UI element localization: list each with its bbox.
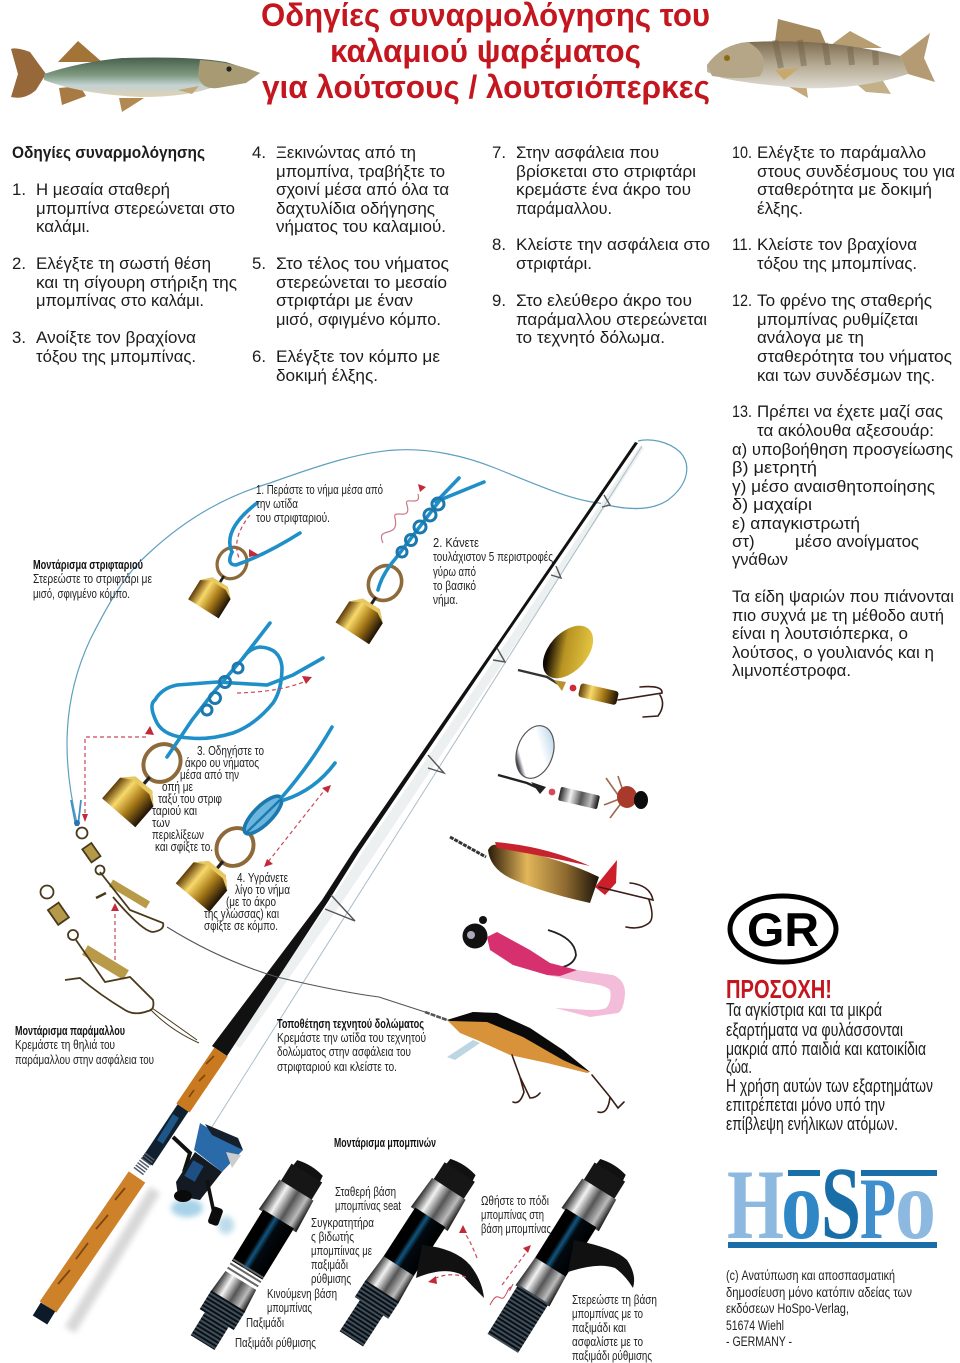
label: push reel foot: βάση μπομπίνας [481, 1221, 551, 1236]
text block: instructions column 4: έλξης. [757, 199, 803, 218]
label: knot step 3: μέσα από την [180, 767, 239, 782]
label: knot step 4: 4. Υγράνετε [237, 870, 288, 885]
text block: instructions column 2: 4. [252, 143, 266, 162]
text block: instructions column 4: τόξου της μπομπίνας. [757, 254, 917, 273]
label: leader mounting: Κρεμάστε τη θηλιά του [15, 1037, 115, 1052]
text block: instructions column 4: λούτσος, ο γουλιανός και η [732, 643, 934, 662]
logo: HoSpo: P [860, 1161, 896, 1258]
labels: reel seat parts: ρύθμισης [311, 1271, 351, 1286]
text block: instructions column 4: β) μετρητή [732, 458, 817, 477]
text block: instructions column 4: ανάλογα με τη [757, 328, 864, 347]
label: push reel foot: Ωθήστε το πόδι [481, 1193, 549, 1208]
warning block: εξαρτήματα να φυλάσσονται [726, 1019, 903, 1040]
label: secure reel seat: ασφαλίστε με το [572, 1334, 643, 1349]
label: swivel mounting: Μοντάρισμα στριφταριού [33, 557, 143, 572]
lure: wobbler [425, 1012, 624, 1112]
copyright text: - GERMANY - [726, 1334, 792, 1349]
labels: reel seat parts: Παξιμάδι ρύθμισης [235, 1335, 316, 1350]
trace leader with open snap [40, 886, 199, 1043]
warning block: ΠΡΟΣΟΧΗ! [726, 974, 832, 1004]
label: knot step 2: νήμα. [433, 592, 458, 607]
label: knot step 3: ταριού και [152, 803, 197, 818]
title: για λούτσους / λουτσιόπερκες [262, 69, 710, 105]
text block: instructions column 4: τα ακόλουθα αξεσουάρ: [757, 421, 934, 440]
label: knot step 2: τουλάχιστον 5 περιστροφές [433, 549, 553, 564]
label: leader mounting: παράμαλλου στην ασφάλεια του [15, 1052, 154, 1067]
label: knot step 4: (με το άκρο [226, 894, 276, 909]
text block: instructions column 4: Τα είδη ψαριών που πιάνονται [732, 587, 954, 606]
label: push reel foot [481, 1193, 551, 1236]
icon: spinning reel [171, 1123, 243, 1234]
logo: HoSpo [727, 1146, 937, 1261]
text block: instructions column 4: 11. [732, 235, 752, 254]
labels: reel seat parts: μπομπίνας seat [335, 1198, 401, 1213]
label: knot step 1: την ωτίδα [256, 496, 298, 511]
text block: instructions column 3 [492, 143, 710, 347]
text block: instructions column 4: 10. [732, 143, 752, 162]
text block: instructions column 1: Οδηγίες συναρμολόγησης [12, 143, 205, 162]
label: knot step 3: περιελίξεων [152, 827, 204, 842]
text block: instructions column 3: παράμαλλου. [516, 199, 612, 218]
labels: reel seat parts: Κινούμενη βάση [267, 1286, 337, 1301]
labels: reel seat parts: Συγκρατητήρα [311, 1215, 374, 1230]
text block: instructions column 4 [732, 143, 955, 680]
text block: instructions column 3: 9. [492, 291, 506, 310]
text block: instructions column 1: 1. [12, 180, 26, 199]
logo: HoSpo: S [821, 1146, 861, 1261]
label: knot step 3: άκρο ου νήματος [185, 755, 259, 770]
heading: reel mounting: Μοντάρισμα μπομπινών [334, 1135, 436, 1150]
text block: instructions column 1: μπομπίνας στο καλάμι. [36, 291, 204, 310]
label: lure placement: δολώματος στην ασφάλεια του [277, 1044, 411, 1059]
lure: silver spinner with fly [498, 721, 648, 818]
wire trace to lure [167, 927, 425, 1012]
copyright text [726, 1268, 912, 1349]
text block: instructions column 3: βρίσκεται στο στριφτάρι [516, 162, 696, 181]
text block: instructions column 4: δ) μαχαίρι [732, 495, 812, 514]
label: knot step 2: γύρω από [433, 564, 476, 579]
lure: gold spinner [518, 616, 663, 717]
labels: reel seat parts: παξιμάδι [311, 1257, 348, 1272]
text block: instructions column 2: στερεώνεται το μεσαίο [276, 273, 447, 292]
reel seat: step 2 [333, 1153, 484, 1351]
label: knot step 4: λίγο το νήμα [235, 882, 290, 897]
text block: instructions column 4: σταθερότητα του νήματος [757, 347, 952, 366]
copyright text: (c) Ανατύπωση και αποσπασματική [726, 1268, 895, 1283]
logo: HoSpo: o [781, 1149, 822, 1260]
text block: instructions column 3: παράμαλλου στερεώνεται [516, 310, 707, 329]
text block: instructions column 4: και των συνδέσμων της. [757, 366, 935, 385]
text block: instructions column 2: νήματος του καλαμιού. [276, 217, 446, 236]
labels: reel seat parts: ς βιδωτής [311, 1229, 354, 1244]
title: καλαμιού ψαρέματος [330, 33, 641, 69]
text block: instructions column 4: 13. [732, 402, 752, 421]
label: swivel mounting [33, 557, 152, 601]
labels: reel seat parts: Σταθερή βάση [335, 1184, 396, 1199]
text block: instructions column 4: 12. [732, 291, 752, 310]
text block: instructions column 4: μέσο ανοίγματος [795, 532, 919, 551]
label: knot step 4: της γλώσσας) και [204, 906, 279, 921]
label: knot step 1 [256, 482, 383, 525]
logo: HoSpo: H [727, 1149, 784, 1260]
text block: instructions column 1: μπομπίνα στερεώνεται στο [36, 199, 235, 218]
text block: instructions column 3: κρεμάστε ένα άκρο του [516, 180, 691, 199]
text block: instructions column 1: Η μεσαία σταθερή [36, 180, 170, 199]
text block: instructions column 1: 3. [12, 328, 26, 347]
label: push reel foot: μπομπίνας στη [481, 1207, 544, 1222]
label: knot step 2: το βασικό [433, 578, 476, 593]
reel seat: step 3 [484, 1154, 634, 1355]
warning block: επιτρέπεται μόνο υπό την [726, 1094, 885, 1115]
label: knot step 1: 1. Περάστε το νήμα μέσα από [256, 482, 383, 497]
copyright text: δημοσίευση μόνο κατόπιν αδείας των [726, 1285, 912, 1300]
text block: instructions column 3: Στο ελεύθερο άκρο του [516, 291, 692, 310]
label: secure reel seat: παξιμάδι και [572, 1320, 626, 1335]
text block: instructions column 4: πιο συχνά με τη μέθοδο αυτή [732, 606, 944, 625]
title [261, 0, 710, 105]
text block: instructions column 4: Πρέπει να έχετε μαζί σας [757, 402, 943, 421]
text block: instructions column 2: μπομπίνα, τραβήξτε το [276, 162, 445, 181]
text block: instructions column 4: μπομπίνας ρυθμίζεται [757, 310, 918, 329]
label: swivel mounting: μισό, σφιγμένο κόμπο. [33, 586, 130, 601]
copyright text: εκδόσεων HoSpo-Verlag, [726, 1301, 849, 1316]
text block: instructions column 2: Στο τέλος του νήματος [276, 254, 449, 273]
text block: instructions column 2: Ξεκινώντας από τη [276, 143, 416, 162]
lure: gold spoon with red fin [450, 837, 653, 928]
text block: instructions column 4: σταθερότητα με δοκιμή [757, 180, 932, 199]
label: secure reel seat: μπομπίνας με το [572, 1306, 643, 1321]
text block: instructions column 4: λιμνοπέστροφα. [732, 661, 851, 680]
text block: instructions column 3: το τεχνητό δόλωμα. [516, 328, 665, 347]
logo: HoSpo: o [895, 1149, 936, 1260]
text block: instructions column 1 [12, 143, 237, 366]
knot step 1 illustration [188, 503, 300, 618]
text block: instructions column 2: δοκιμή έλξης. [276, 366, 378, 385]
labels: reel seat parts: μπομπίνας [267, 1300, 312, 1315]
text block: instructions column 3: Στην ασφάλεια που [516, 143, 659, 162]
label: knot step 2: 2. Κάνετε [433, 535, 479, 550]
label: swivel mounting: Στερεώστε το στριφτάρι με [33, 571, 152, 586]
text block: instructions column 4: γ) μέσο αναισθητοποίησης [732, 477, 935, 496]
knot step 4 illustration [176, 727, 335, 912]
text block: instructions column 4: ε) απαγκιστρωτή [732, 514, 860, 533]
swivel and snap mounted on line [71, 800, 163, 932]
label: knot step 3: των [152, 815, 170, 830]
warning block: Τα αγκίστρια και τα μικρά [726, 999, 882, 1020]
text block: instructions column 4: α) υποβοήθηση προσγείωσης [732, 440, 953, 459]
text block: instructions column 4: στους συνδέσμους του για [757, 162, 955, 181]
labels: reel seat parts: Παξιμάδι [246, 1315, 284, 1330]
labels: reel seat parts: μπομπίινας με [311, 1243, 372, 1258]
text block: instructions column 1: και τη σίγουρη στήριξη της [36, 273, 237, 292]
text block: instructions column 1: 2. [12, 254, 26, 273]
icon: GR country badge: GR [747, 903, 819, 956]
label: leader mounting [15, 1023, 154, 1067]
label: knot step 3: οπή με [162, 779, 193, 794]
warning block: επίβλεψη ενήλικων ατόμων. [726, 1113, 898, 1134]
label: secure reel seat [572, 1292, 657, 1363]
label: lure placement: Κρεμάστε την ωτίδα του τεχνητού [277, 1030, 426, 1045]
text block: instructions column 2 [252, 143, 449, 385]
text block: instructions column 2: στριφτάρι με έναν [276, 291, 413, 310]
label: lure placement [277, 1016, 426, 1074]
label: knot step 4: σφίξτε σε κόμπο. [204, 918, 278, 933]
reel seat: step 1 [184, 1155, 330, 1354]
knot step 3 illustration [82, 623, 323, 827]
text block: instructions column 1: Ανοίξτε τον βραχίονα [36, 328, 196, 347]
label: lure placement: Τοποθέτηση τεχνητού δολώματος [277, 1016, 424, 1031]
text block: instructions column 3: 8. [492, 235, 506, 254]
lure: pink jig [462, 916, 625, 1017]
text block: instructions column 2: μισό, σφιγμένο κόμπο. [276, 310, 441, 329]
text block: instructions column 3: στριφτάρι. [516, 254, 592, 273]
text block: instructions column 2: 5. [252, 254, 266, 273]
knot step 2 illustration [336, 478, 484, 644]
label: secure reel seat: Στερεώστε τη βάση [572, 1292, 657, 1307]
label: knot step 3: 3. Οδηγήστε το [197, 743, 264, 758]
text block: instructions column 4: Κλείστε τον βραχίονα [757, 235, 917, 254]
text block: instructions column 1: τόξου της μπομπίνας. [36, 347, 196, 366]
text block: instructions column 4: είναι η λουτσιόπερκα, ο [732, 624, 908, 643]
icon: zander fish [707, 19, 935, 98]
label: knot step 3 [152, 743, 264, 854]
warning block: ζώα. [726, 1056, 752, 1077]
text block: instructions column 2: δαχτυλίδια οδήγησης [276, 199, 435, 218]
fishing rod [40, 442, 644, 1330]
label: knot step 3: ταξύ του στριφ [158, 791, 222, 806]
text block: instructions column 1: Ελέγξτε τη σωστή θέση [36, 254, 211, 273]
text block: instructions column 4: Ελέγξτε το παράμαλλο [757, 143, 926, 162]
fishing line from rod tip to swivel [67, 440, 687, 823]
text block: instructions column 2: σχοινί μέσα από όλα τα [276, 180, 449, 199]
text block: instructions column 4: Το φρένο της σταθερής [757, 291, 932, 310]
text block: instructions column 3: 7. [492, 143, 506, 162]
icon: pike fish [11, 41, 260, 112]
label: lure placement: στριφταριού και κλείστε το. [277, 1059, 397, 1074]
text block: instructions column 4: γνάθων [732, 550, 788, 569]
text block: instructions column 1: καλάμι. [36, 217, 90, 236]
icon: GR country badge [730, 896, 836, 962]
label: leader mounting: Μοντάρισμα παράμαλλου [15, 1023, 125, 1038]
copyright text: 51674 Wiehl [726, 1318, 784, 1333]
label: knot step 2 [433, 535, 553, 607]
label: knot step 3: και σφίξτε το. [155, 839, 213, 854]
text block: instructions column 2: Ελέγξτε τον κόμπο με [276, 347, 441, 366]
text block: instructions column 4: στ) [732, 532, 755, 551]
label: knot step 4 [204, 870, 290, 933]
warning block [726, 974, 933, 1134]
label: knot step 1: του στριφταριού. [256, 510, 330, 525]
text block: instructions column 3: Κλείστε την ασφάλεια στο [516, 235, 710, 254]
labels: reel seat parts [235, 1184, 401, 1350]
text block: instructions column 2: 6. [252, 347, 266, 366]
label: secure reel seat: παξιμάδι ρύθμισης [572, 1348, 652, 1363]
